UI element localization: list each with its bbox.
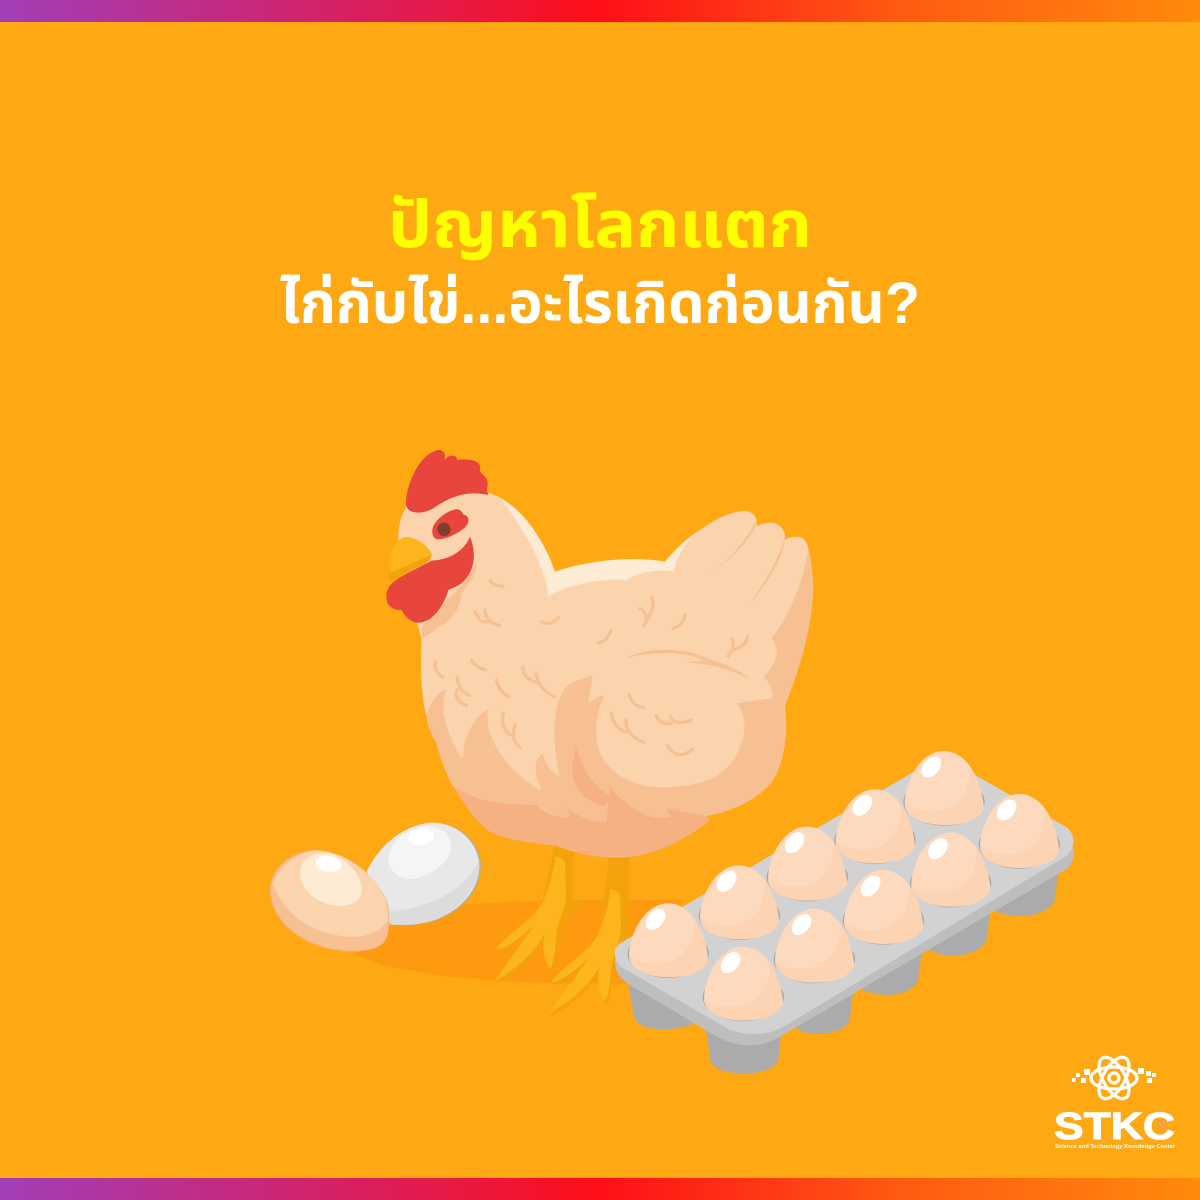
tray edge	[615, 847, 1074, 1045]
top gradient bar	[0, 0, 1200, 22]
chicken	[386, 450, 813, 858]
chicken legs and feet	[495, 846, 629, 1016]
ground shadow	[353, 899, 683, 983]
front foot	[548, 889, 621, 1013]
title line 1: ปัญหาโลกแตก	[388, 187, 812, 261]
logo pixels	[1072, 1068, 1156, 1083]
main plumage	[398, 473, 808, 791]
egg	[767, 827, 848, 901]
logo dot	[1156, 1120, 1168, 1130]
bottom gradient bar	[0, 1178, 1200, 1200]
mid tone body and tail	[425, 537, 813, 822]
tail feather lines	[707, 520, 785, 607]
wattle shadow	[422, 563, 477, 639]
egg row back	[903, 751, 985, 826]
STKC logo	[1054, 1053, 1176, 1150]
wing line	[625, 650, 751, 680]
egg	[628, 903, 709, 978]
beak upper	[390, 537, 432, 573]
back foot	[495, 857, 566, 981]
brown and white eggs on the ground	[270, 823, 481, 952]
white egg	[367, 823, 481, 925]
eye patch	[432, 509, 468, 539]
title line 2: ไก่กับไข่...อะไรเกิดก่อนกัน?	[280, 271, 920, 336]
atom icon	[1091, 1053, 1137, 1103]
eye	[437, 523, 451, 536]
egg	[699, 865, 780, 940]
logo wordmark: STKC	[1054, 1106, 1175, 1148]
back leg shadow	[543, 846, 584, 953]
egg row front	[979, 794, 1060, 869]
egg	[843, 870, 924, 945]
dark feather accent	[572, 746, 611, 806]
tray cups	[628, 873, 1058, 1073]
front toes shadow	[550, 892, 623, 1016]
egg	[703, 947, 784, 1021]
egg tray	[615, 751, 1074, 1073]
brown egg	[270, 850, 390, 952]
belly dark plumage	[435, 740, 710, 858]
front leg shadow	[600, 857, 629, 967]
egg	[834, 789, 916, 864]
title block	[280, 187, 920, 336]
head comb	[406, 450, 488, 513]
wattle	[386, 537, 474, 623]
egg	[774, 909, 855, 983]
cream back highlight	[488, 493, 717, 607]
back toes shadow	[497, 860, 568, 984]
tray top	[615, 755, 1073, 1034]
feather marks	[435, 581, 748, 755]
logo tagline: Science and Technology Knowledge Center	[1055, 1144, 1176, 1150]
egg	[910, 833, 991, 907]
beak lower	[389, 554, 432, 582]
